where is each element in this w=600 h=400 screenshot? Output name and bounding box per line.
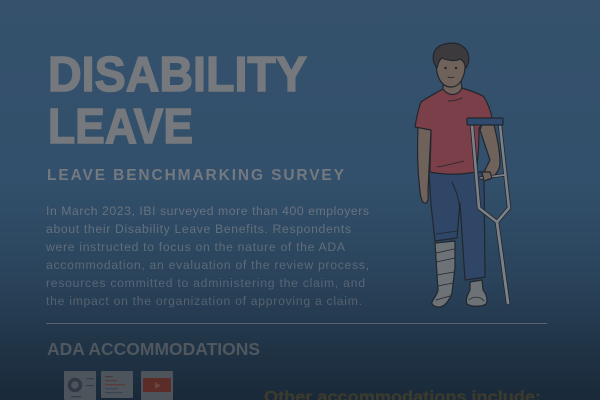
icon: video window xyxy=(141,371,173,400)
left arm xyxy=(418,127,431,203)
head xyxy=(436,54,465,87)
hair xyxy=(433,43,469,68)
t-shirt xyxy=(415,88,492,174)
intro paragraph: the impact on the organization of approving a claim. xyxy=(46,294,362,308)
neck xyxy=(443,80,462,96)
intro paragraph xyxy=(45,204,369,308)
section heading: ADA accommodations: ADA ACCOMMODATIONS xyxy=(47,339,260,359)
face details xyxy=(444,67,457,69)
intro paragraph: resources committed to administering the claim, and xyxy=(46,276,365,290)
illustration: man on crutch xyxy=(415,43,509,307)
icon: code window xyxy=(101,371,133,398)
hand over grip xyxy=(482,172,492,181)
bandaged leg xyxy=(432,241,455,307)
title: LEAVE xyxy=(48,100,193,154)
icon: settings window xyxy=(64,371,96,400)
intro paragraph: were instructed to focus on the nature of the ADA xyxy=(45,240,346,254)
intro paragraph: accommodation, an evaluation of the review process, xyxy=(46,258,369,272)
right foot xyxy=(466,280,487,306)
title: DISABILITY xyxy=(48,48,307,102)
jeans xyxy=(429,172,485,280)
title xyxy=(48,48,307,154)
divider xyxy=(46,323,547,324)
subtitle: LEAVE BENCHMARKING SURVEY xyxy=(47,167,345,184)
intro paragraph: In March 2023, IBI surveyed more than 400 employers xyxy=(46,204,369,218)
crutch xyxy=(472,125,509,303)
right arm xyxy=(480,118,500,180)
intro paragraph: about their Disability Leave Benefits. Respondents xyxy=(46,222,351,236)
